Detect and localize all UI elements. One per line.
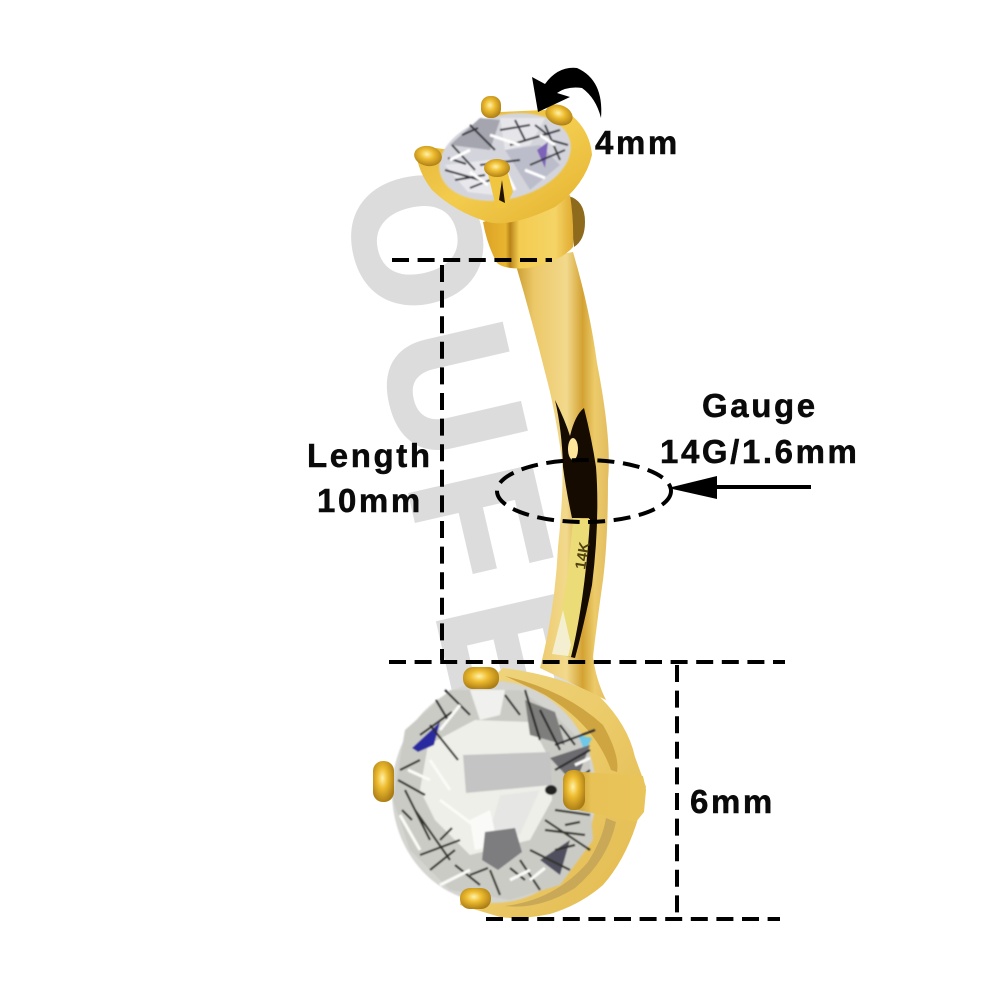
jewellery bar [515, 252, 609, 700]
dashed ellipse: gauge [497, 460, 671, 522]
dashed line: bottom [486, 917, 780, 921]
watermark: OUFER: U [342, 306, 565, 476]
dashed line: length vertical [440, 265, 444, 660]
stone [430, 100, 580, 214]
dashed line: middle [389, 660, 785, 664]
watermark: OUFER: R [429, 701, 652, 871]
label: 14G/1.6mm: 14G/1.6mm [660, 433, 860, 470]
prong: top [481, 96, 501, 118]
prong: left [373, 761, 394, 802]
cup [416, 110, 592, 223]
watermark: OUFER: F [371, 447, 590, 598]
watermark: OUFER: E [399, 575, 620, 736]
bar highlight [568, 438, 578, 460]
watermark: OUFER [305, 151, 652, 871]
dashed line: top of length [392, 258, 552, 262]
prong: right [563, 770, 585, 810]
large stone setting [373, 667, 646, 918]
label: 4mm: 4mm [595, 124, 680, 161]
14K mark: 14K [572, 540, 594, 571]
prong: right [542, 101, 576, 129]
label: Length: Length [307, 437, 433, 474]
small stone setting [412, 96, 592, 268]
arrow: gauge pointer [668, 476, 811, 499]
label: Gauge: Gauge [702, 387, 818, 424]
label: 10mm: 10mm [317, 482, 423, 519]
engraved plate [552, 518, 590, 657]
arrow: curved 4mm [532, 68, 601, 118]
collar [483, 195, 585, 268]
gold back [460, 668, 646, 918]
watermark: OUFER: O [305, 151, 530, 330]
label: 6mm: 6mm [690, 783, 775, 820]
right prong band [568, 771, 646, 822]
bar shadow band [555, 400, 597, 658]
prong: bottom [460, 888, 491, 909]
plate reflection [552, 610, 571, 656]
prong: left [412, 144, 444, 168]
prong: top [463, 667, 499, 689]
lower rim [505, 818, 616, 907]
inner rim [505, 676, 617, 772]
stone [392, 681, 596, 903]
dashed line: 6mm vertical [675, 665, 679, 918]
front prong and cup highlight [484, 159, 513, 208]
